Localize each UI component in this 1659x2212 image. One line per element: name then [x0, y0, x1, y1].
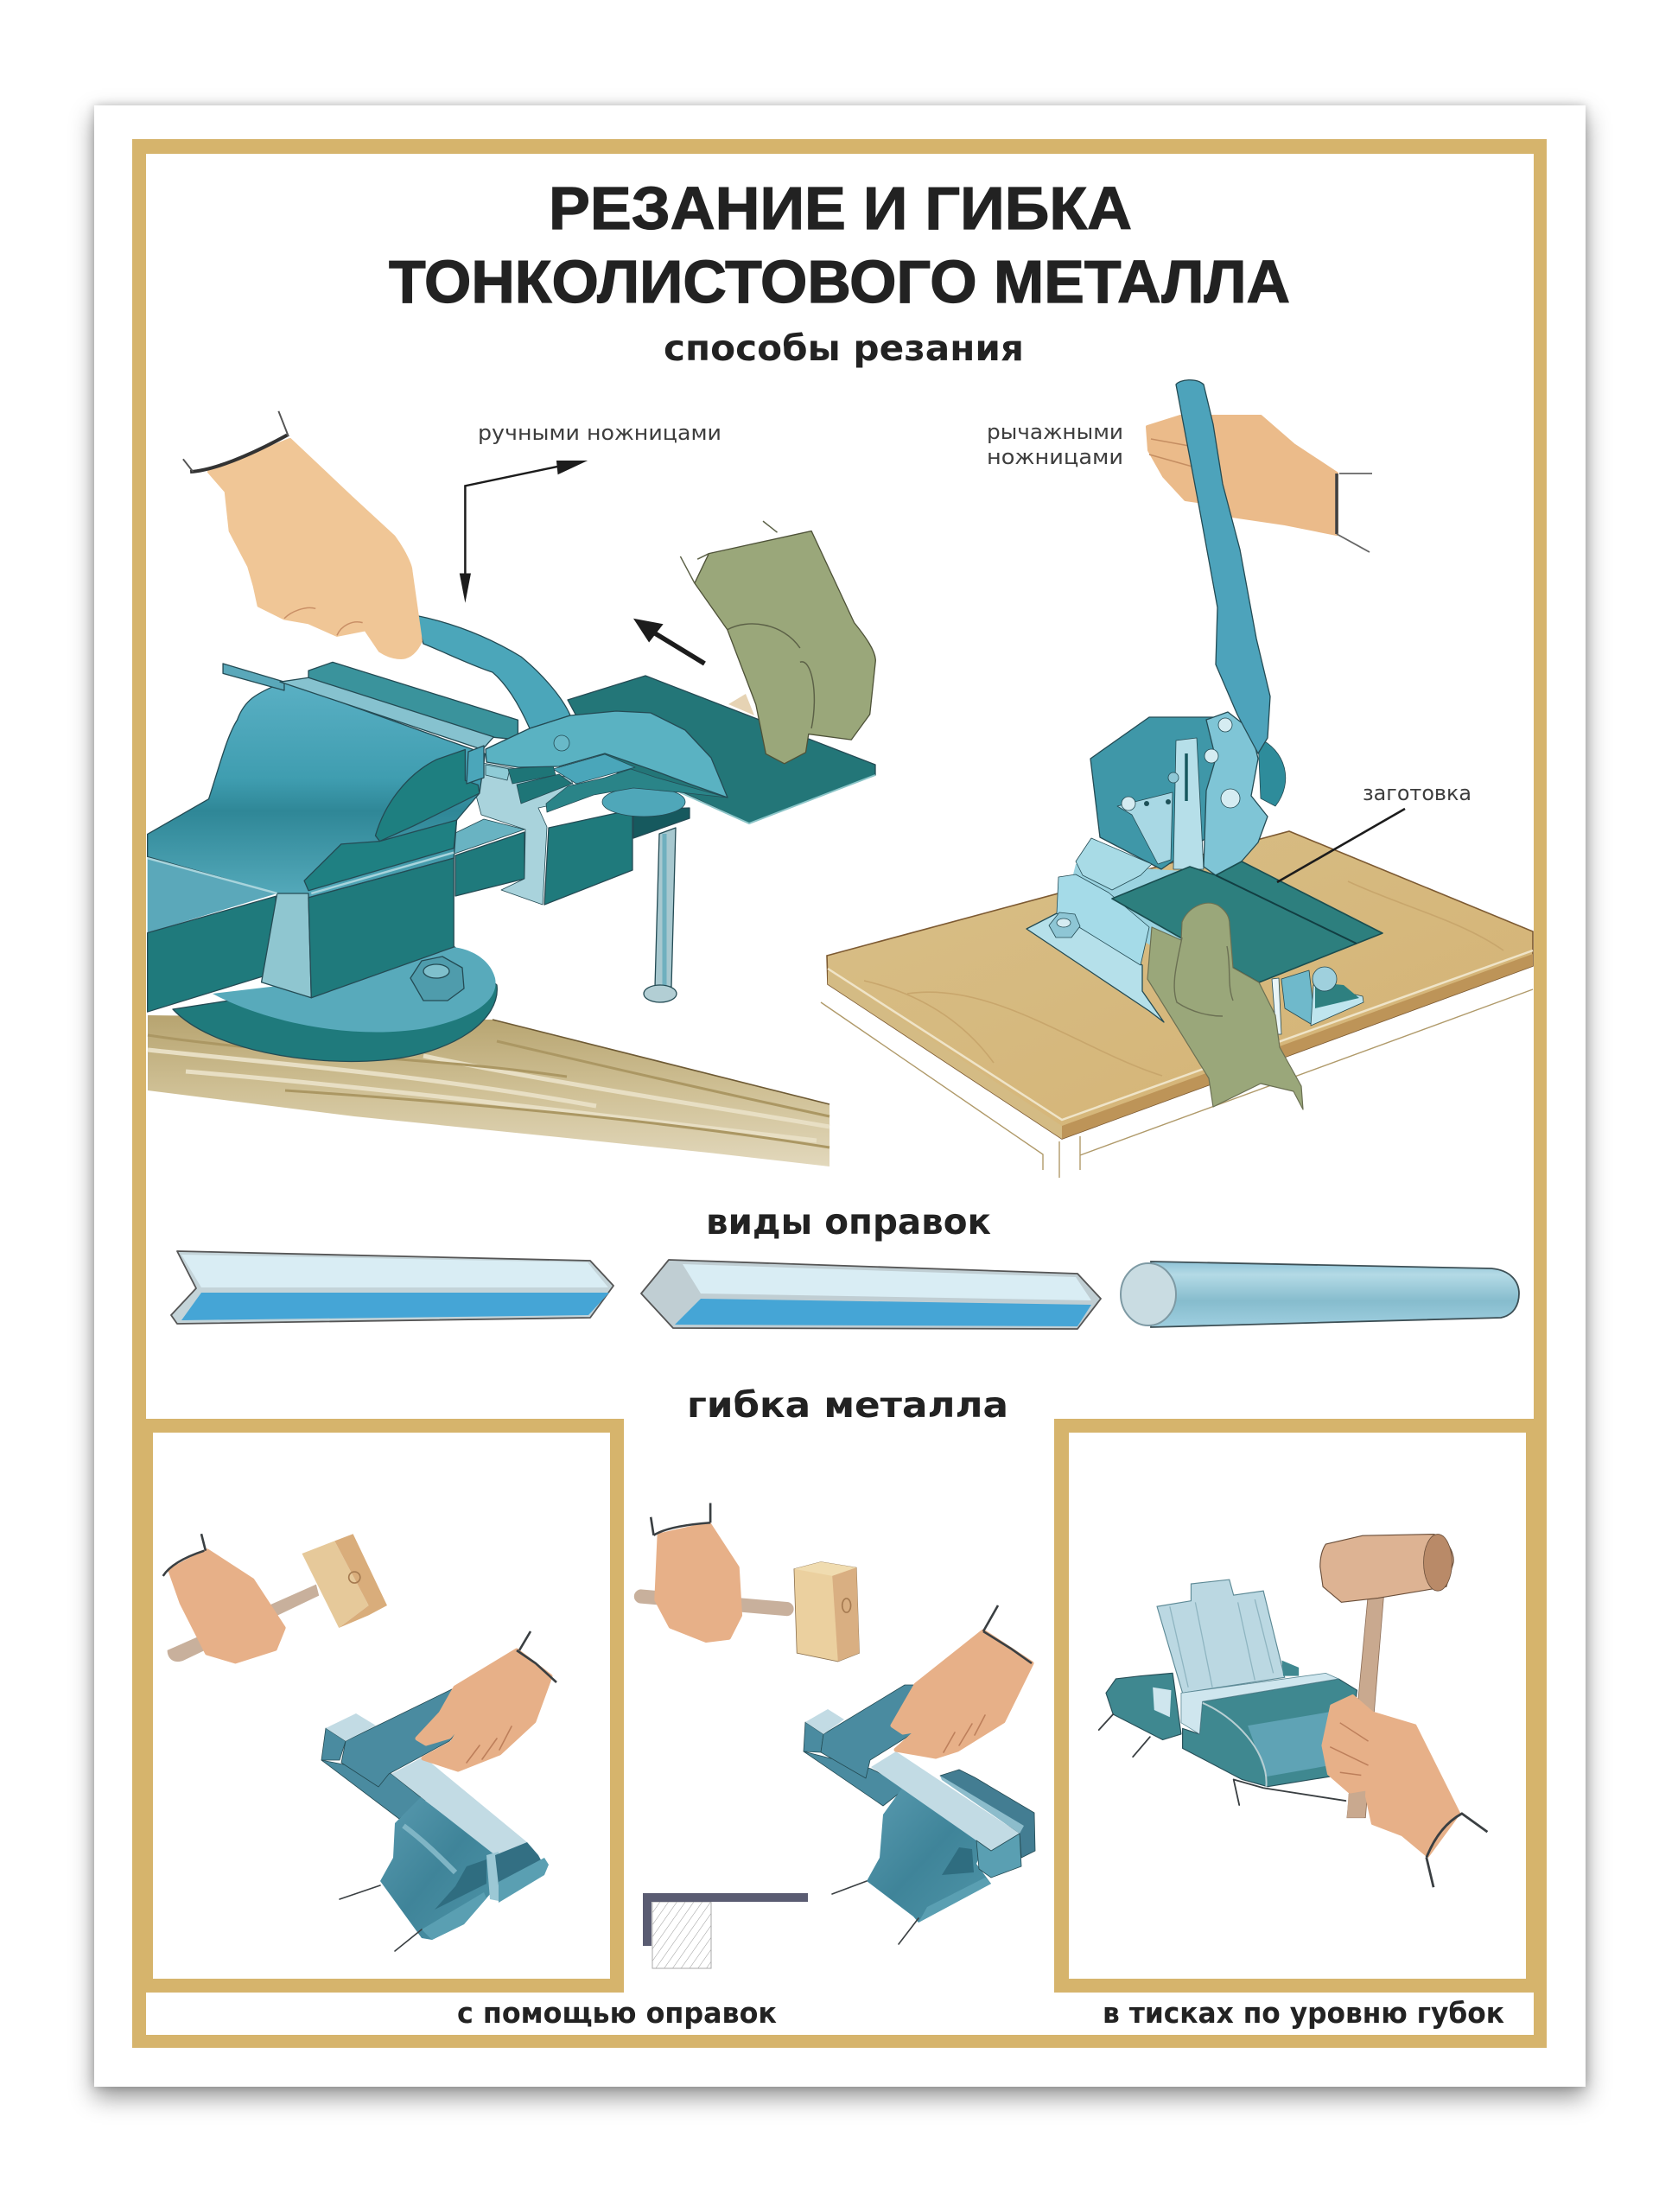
shear frame plate: [1067, 717, 1218, 959]
panel: bending in vise at jaw level: [1099, 1535, 1487, 1887]
steadying hand: [417, 1631, 556, 1770]
heading: cutting methods: способы резания: [664, 327, 1024, 369]
mandrel: angle: [171, 1251, 613, 1324]
hand shears: [415, 615, 875, 823]
label: lever shears: рычажными: [987, 420, 1123, 444]
vise base and bolt: [173, 946, 497, 1061]
right foot: [1272, 967, 1363, 1034]
label: workpiece: заготовка: [1363, 781, 1471, 805]
label: hand shears: ручными ножницами: [478, 421, 721, 445]
mandrel: round: [1121, 1262, 1519, 1327]
cut direction arrow: [633, 619, 704, 664]
pointer arrow: hand shears: [460, 461, 588, 603]
sheet metal thumb: [728, 694, 754, 715]
vise: [1099, 1661, 1357, 1805]
caption: in vise: в тисках по уровню губок: [1103, 1996, 1504, 2030]
gloved hand on sheet: [1147, 903, 1303, 1109]
caption: with mandrels: с помощью оправок: [457, 1996, 777, 2030]
gloved hand: [680, 521, 875, 764]
hand on lever: [1147, 416, 1372, 552]
mallet: [163, 1534, 387, 1662]
heading: metal bending: гибка металла: [687, 1384, 1008, 1426]
vise rear blocks: [432, 760, 690, 905]
heading: mandrel types: виды оправок: [706, 1201, 991, 1243]
vise front body: [148, 682, 485, 1012]
bent sheet: [1157, 1580, 1285, 1693]
screw rod: [644, 828, 677, 1002]
panel: bending with mandrels middle: [633, 1503, 1035, 1944]
title: РЕЗАНИЕ И ГИБКА: [549, 175, 1132, 242]
bent work in vise: [804, 1685, 1035, 1944]
hand with mallet: [163, 1534, 283, 1662]
bare hand: [183, 411, 421, 658]
illustration: lever shears on board: [821, 380, 1533, 1178]
title: ТОНКОЛИСТОВОГО МЕТАЛЛА: [389, 248, 1290, 315]
wooden board: [827, 831, 1533, 1139]
illustration: hand shears in bench vise: [148, 411, 875, 1166]
title: [389, 175, 1290, 315]
table lines: [821, 989, 1533, 1178]
workpiece sheet: [1112, 861, 1382, 982]
mallet: [633, 1503, 859, 1662]
vise jaws: [223, 662, 518, 750]
shear base: [1027, 838, 1164, 1022]
hand with mallet: [651, 1503, 741, 1641]
profile section: sheet on mandrel: [643, 1893, 808, 1968]
label: lever shears: [987, 420, 1123, 469]
gold frame: [132, 139, 1547, 2048]
wooden bench: [148, 1015, 830, 1166]
mandrel: square: [641, 1260, 1101, 1329]
shear lever: [1176, 380, 1270, 753]
label: lever shears: ножницами: [987, 445, 1123, 469]
pointer line: workpiece: [1277, 809, 1405, 882]
panel: bending with mandrels left: [163, 1534, 556, 1951]
steadying hand: [893, 1605, 1032, 1757]
bent work in vise: [321, 1688, 549, 1951]
hand with mallet: [1323, 1696, 1487, 1887]
wooden mallet: [1320, 1535, 1453, 1818]
shear knuckle and blade disc: [1204, 712, 1286, 877]
